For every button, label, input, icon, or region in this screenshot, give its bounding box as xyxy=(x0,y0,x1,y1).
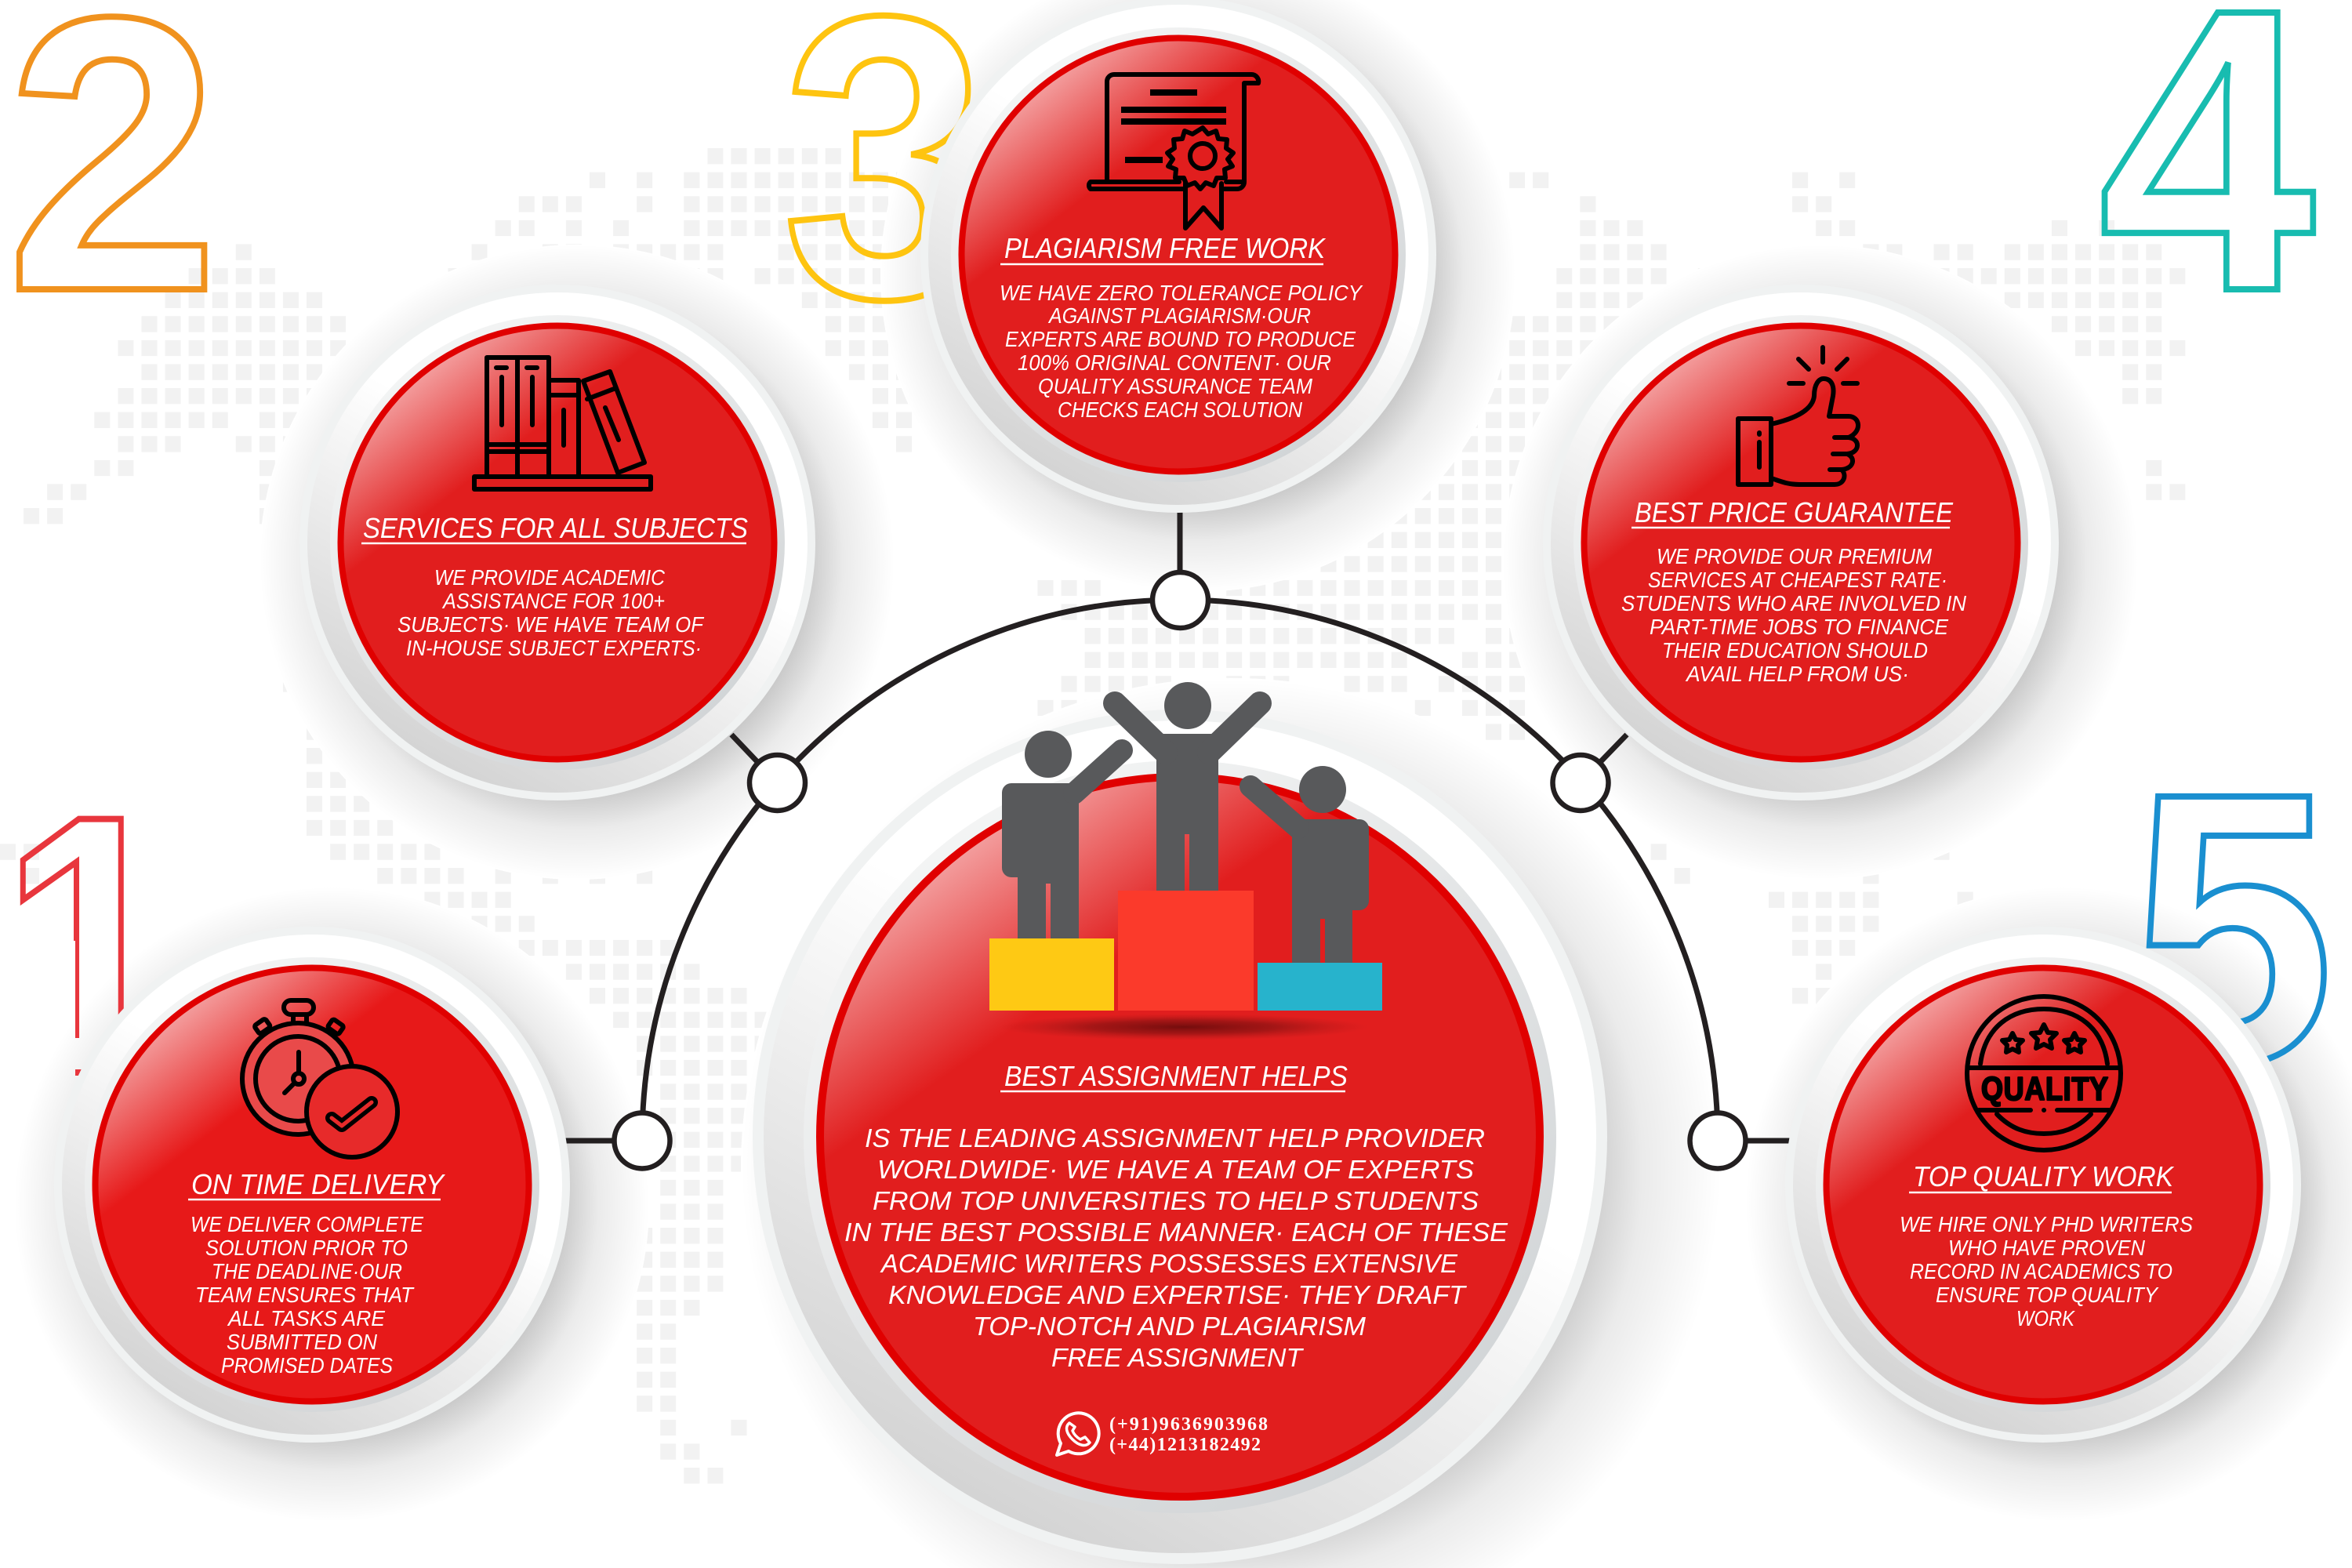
contact numbers: (+91)9636903968 xyxy=(1109,1414,1268,1435)
icon: stopwatch with check xyxy=(242,1000,397,1157)
panel: best price guarantee xyxy=(1547,289,2055,797)
text block: top quality work: WHO HAVE PROVEN xyxy=(1948,1236,2146,1260)
figure: centre person xyxy=(1115,682,1260,891)
heading: plagiarism free work: PLAGIARISM FREE WORK xyxy=(1004,232,1327,264)
text block: plagiarism free work: EXPERTS ARE BOUND TO PRODUCE xyxy=(1005,327,1356,351)
panel: top quality work xyxy=(1789,931,2297,1439)
icon: quality badge xyxy=(1967,996,2121,1150)
heading: best price guarantee: BEST PRICE GUARANTEE xyxy=(1635,496,1954,528)
text block: plagiarism free work: AGAINST PLAGIARISM·OUR xyxy=(1047,303,1311,328)
text block: best price guarantee: AVAIL HELP FROM US· xyxy=(1685,662,1909,686)
text block: plagiarism free work: WE HAVE ZERO TOLERANCE POLICY xyxy=(1000,281,1363,305)
text block: best price guarantee: SERVICES AT CHEAPEST RATE· xyxy=(1648,568,1947,592)
number 5 outline: 5 xyxy=(2131,713,2334,1142)
text block: best assignment helps: ACADEMIC WRITERS POSSESSES EXTENSIVE xyxy=(880,1249,1458,1278)
text block: on time delivery: TEAM ENSURES THAT xyxy=(195,1283,415,1307)
icon: three people on a podium xyxy=(989,682,1382,1040)
figure: left person xyxy=(1002,731,1122,938)
panel: on time delivery xyxy=(58,931,566,1439)
text block: top quality work xyxy=(1900,1212,2193,1330)
text block: best assignment helps: TOP-NOTCH AND PLAGIARISM xyxy=(973,1312,1367,1341)
heading: best assignment helps: BEST ASSIGNMENT HELPS xyxy=(1004,1060,1348,1092)
text block: best price guarantee xyxy=(1621,544,1967,686)
text block: best price guarantee: STUDENTS WHO ARE INVOLVED IN xyxy=(1621,591,1967,615)
text block: top quality work: WORK xyxy=(2016,1306,2075,1330)
text block: plagiarism free work: 100% ORIGINAL CONTENT· OUR xyxy=(1018,350,1331,375)
heading: services for all subjects: SERVICES FOR ALL SUBJECTS xyxy=(363,512,748,544)
panel: services for all subjects xyxy=(303,289,811,797)
text block: top quality work: ENSURE TOP QUALITY xyxy=(1936,1283,2159,1307)
text block: services for all subjects: IN-HOUSE SUBJECT EXPERTS· xyxy=(406,636,702,660)
text block: services for all subjects xyxy=(397,565,705,660)
text block: services for all subjects: ASSISTANCE FOR 100+ xyxy=(441,589,665,613)
contact numbers xyxy=(1109,1414,1268,1455)
text block: services for all subjects: WE PROVIDE ACADEMIC xyxy=(434,565,666,590)
icon: thumbs up xyxy=(1738,347,1858,485)
text block: best assignment helps xyxy=(844,1123,1508,1372)
icon: certificate with seal xyxy=(1089,74,1258,228)
text block: on time delivery: PROMISED DATES xyxy=(221,1353,393,1377)
connecting arc with nodes xyxy=(564,510,1791,1168)
text block: best price guarantee: THEIR EDUCATION SHOULD xyxy=(1662,638,1928,662)
text block: best assignment helps: FROM TOP UNIVERSITIES TO HELP STUDENTS xyxy=(873,1186,1479,1215)
text block: top quality work: WE HIRE ONLY PHD WRITERS xyxy=(1900,1212,2193,1236)
text block: best price guarantee: WE PROVIDE OUR PREMIUM xyxy=(1657,544,1933,568)
text block: best assignment helps: WORLDWIDE· WE HAVE A TEAM OF EXPERTS xyxy=(877,1155,1474,1184)
icon: whatsapp phone xyxy=(1057,1413,1099,1455)
heading: on time delivery: ON TIME DELIVERY xyxy=(191,1168,446,1200)
text block: services for all subjects: SUBJECTS· WE HAVE TEAM OF xyxy=(397,612,705,637)
figure: right person xyxy=(1250,766,1369,963)
icon: quality badge: QUALITY xyxy=(1981,1072,2108,1108)
text block: on time delivery: SOLUTION PRIOR TO xyxy=(205,1236,408,1260)
text block: best assignment helps: IS THE LEADING ASSIGNMENT HELP PROVIDER xyxy=(865,1123,1485,1152)
heading: top quality work: TOP QUALITY WORK xyxy=(1913,1160,2175,1192)
text block: top quality work: RECORD IN ACADEMICS TO xyxy=(1910,1259,2172,1283)
text block: plagiarism free work xyxy=(1000,281,1363,422)
text block: plagiarism free work: CHECKS EACH SOLUTION xyxy=(1058,397,1303,422)
text block: best assignment helps: KNOWLEDGE AND EXPERTISE· THEY DRAFT xyxy=(888,1280,1468,1309)
text block: on time delivery: WE DELIVER COMPLETE xyxy=(191,1212,423,1236)
text block: plagiarism free work: QUALITY ASSURANCE TEAM xyxy=(1038,374,1313,398)
panel: plagiarism free work xyxy=(924,1,1432,509)
text block: on time delivery: SUBMITTED ON xyxy=(227,1330,378,1354)
number 1 outline: 1 xyxy=(1,739,181,1151)
text block: on time delivery: ALL TASKS ARE xyxy=(227,1306,385,1330)
text block: on time delivery xyxy=(191,1212,423,1377)
panel: best assignment helps xyxy=(758,682,1602,1559)
text block: best price guarantee: PART-TIME JOBS TO FINANCE xyxy=(1650,615,1948,639)
contact numbers: (+44)1213182492 xyxy=(1109,1435,1261,1455)
text block: on time delivery: THE DEADLINE·OUR xyxy=(212,1259,402,1283)
text block: best assignment helps: FREE ASSIGNMENT xyxy=(1051,1343,1305,1372)
icon: books on a shelf xyxy=(474,358,651,489)
text block: best assignment helps: IN THE BEST POSSIBLE MANNER· EACH OF THESE xyxy=(844,1218,1508,1247)
